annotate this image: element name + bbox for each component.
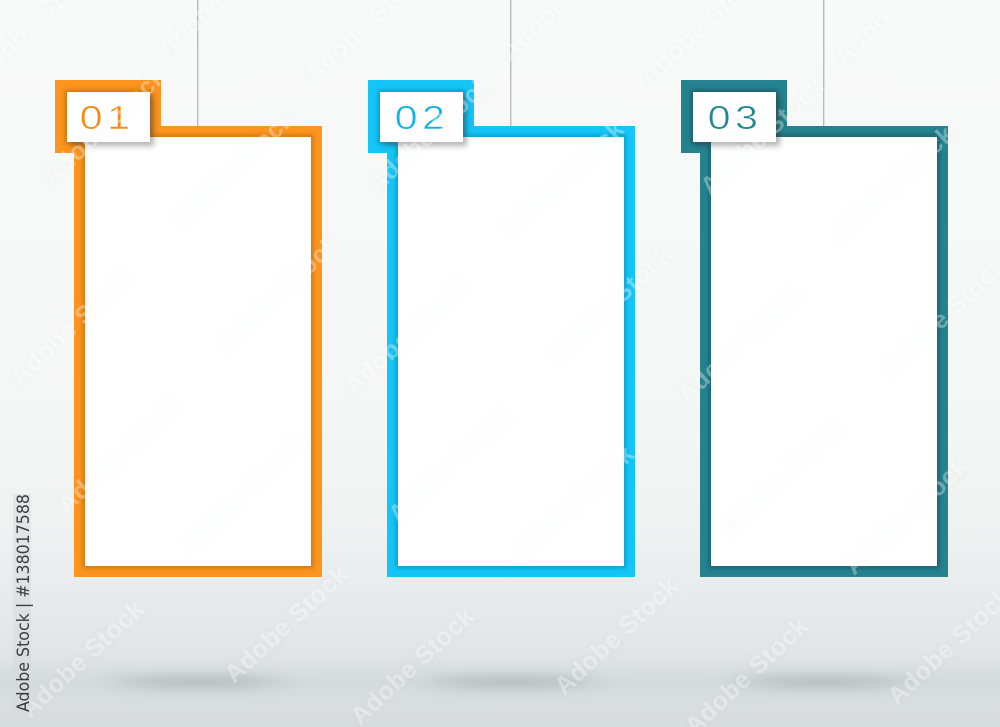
side credit text: Adobe Stock | #138017588 bbox=[14, 494, 34, 712]
content area 3 bbox=[711, 137, 937, 566]
panel 2: blue bbox=[368, 0, 635, 577]
watermark pattern: Adobe Stock bbox=[495, 115, 630, 243]
number tab shadow 2 bbox=[384, 96, 467, 146]
number tab 2 bbox=[380, 92, 463, 142]
panel 1: orange bbox=[55, 0, 322, 577]
watermark pattern: Adobe Stock bbox=[543, 240, 678, 368]
watermark pattern: Adobe Stock bbox=[339, 272, 474, 400]
watermark pattern: Adobe Stock bbox=[219, 560, 354, 688]
number tab shadow 1 bbox=[71, 96, 154, 146]
floor shadow band bbox=[0, 674, 1000, 688]
watermark pattern: Adobe Stock bbox=[5, 262, 140, 390]
frame 1 bbox=[55, 80, 322, 577]
watermark pattern: Adobe Stock bbox=[15, 595, 150, 723]
watermark pattern: Adobe Stock bbox=[695, 72, 830, 200]
watermark pattern: Adobe Stock bbox=[37, 62, 172, 190]
number 03: 03 bbox=[708, 99, 762, 136]
watermark pattern: Adobe Stock bbox=[672, 280, 807, 408]
number 02: 02 bbox=[395, 99, 449, 136]
frame 2 bbox=[368, 80, 635, 577]
panel 3: teal bbox=[681, 0, 948, 577]
watermark pattern: Adobe Stock bbox=[549, 572, 684, 700]
floor shadow 1 bbox=[116, 676, 280, 688]
hanging string 3 bbox=[823, 0, 824, 127]
watermark pattern: Adobe Stock bbox=[175, 430, 310, 558]
number tab 3 bbox=[693, 92, 776, 142]
number tab shadow 3 bbox=[697, 96, 780, 146]
watermark pattern: Adobe Stock bbox=[362, 70, 497, 198]
watermark pattern: Adobe Stock bbox=[839, 452, 974, 580]
floor shadow 2 bbox=[429, 676, 593, 688]
watermark pattern: Adobe Stock bbox=[505, 440, 640, 568]
frame 3 inner shade bbox=[693, 92, 937, 566]
hanging string 2 bbox=[510, 0, 511, 127]
number 01: 01 bbox=[80, 99, 134, 136]
watermark pattern: Adobe Stock bbox=[825, 120, 960, 248]
frame 3 bbox=[681, 80, 948, 577]
frame 1 inner shade bbox=[67, 92, 311, 566]
watermark pattern: Adobe Stock bbox=[52, 390, 187, 518]
hanging string 1 bbox=[197, 0, 198, 127]
frame 2 inner shade bbox=[380, 92, 624, 566]
floor shadow 3 bbox=[742, 676, 906, 688]
watermark pattern: Adobe Stock bbox=[165, 105, 300, 233]
watermark pattern: Adobe Stock bbox=[210, 230, 345, 358]
watermark pattern: Adobe Stock bbox=[715, 412, 850, 540]
content area 2 bbox=[398, 137, 624, 566]
content area 1 bbox=[85, 137, 311, 566]
watermark pattern: Adobe Stock bbox=[383, 400, 518, 528]
watermark pattern: Adobe Stock bbox=[345, 602, 480, 727]
number tab 1 bbox=[67, 92, 150, 142]
